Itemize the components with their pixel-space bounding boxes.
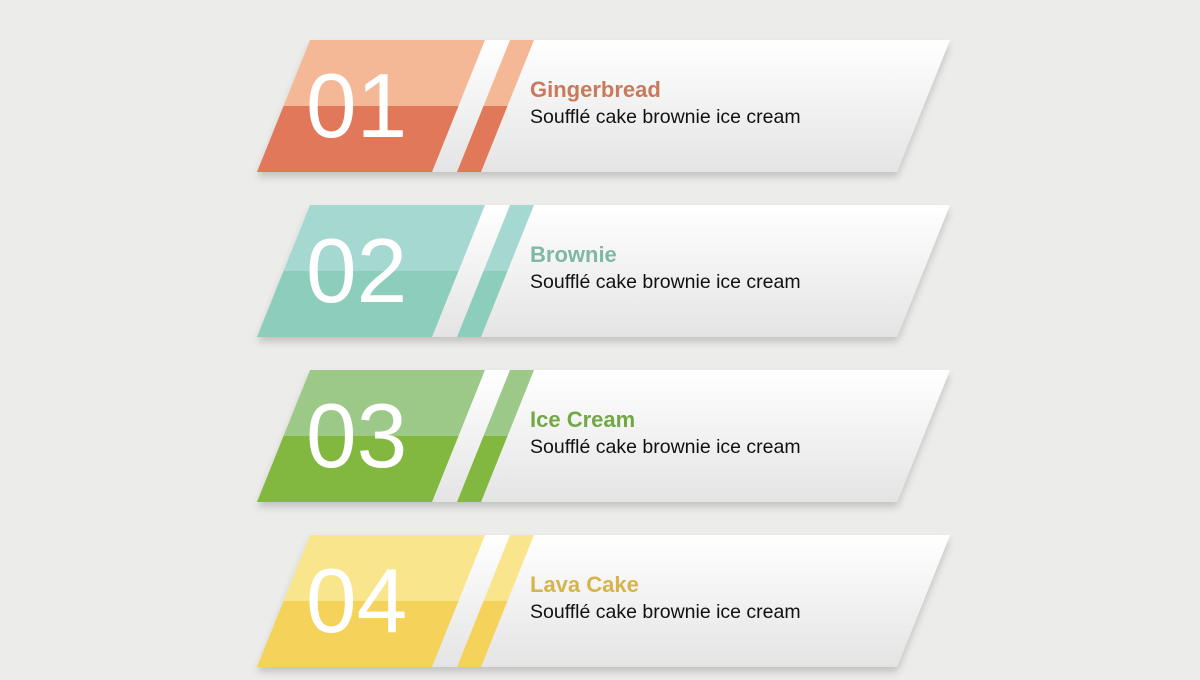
card bbox=[257, 40, 950, 172]
item 2: Brownie bbox=[257, 205, 950, 337]
card bbox=[257, 370, 950, 502]
description: Soufflé cake brownie ice cream bbox=[530, 271, 801, 293]
title: Gingerbread bbox=[530, 77, 661, 102]
description: Soufflé cake brownie ice cream bbox=[530, 106, 801, 128]
color block 02 bbox=[257, 205, 534, 337]
number 04: 04 bbox=[306, 551, 407, 652]
color block 01 bbox=[257, 40, 534, 172]
description: Soufflé cake brownie ice cream bbox=[530, 601, 801, 623]
title: Lava Cake bbox=[530, 572, 639, 597]
description: Soufflé cake brownie ice cream bbox=[530, 436, 801, 458]
color block 04 bbox=[257, 535, 534, 667]
color block 03 bbox=[257, 370, 534, 502]
title: Ice Cream bbox=[530, 407, 635, 432]
card bbox=[257, 535, 950, 667]
item 4: Lava Cake bbox=[257, 535, 950, 667]
item 1: Gingerbread bbox=[257, 40, 950, 172]
title: Brownie bbox=[530, 242, 617, 267]
card bbox=[257, 205, 950, 337]
number 02: 02 bbox=[306, 221, 407, 322]
item 3: Ice Cream bbox=[257, 370, 950, 502]
number 03: 03 bbox=[306, 386, 407, 487]
number 01: 01 bbox=[306, 56, 407, 157]
